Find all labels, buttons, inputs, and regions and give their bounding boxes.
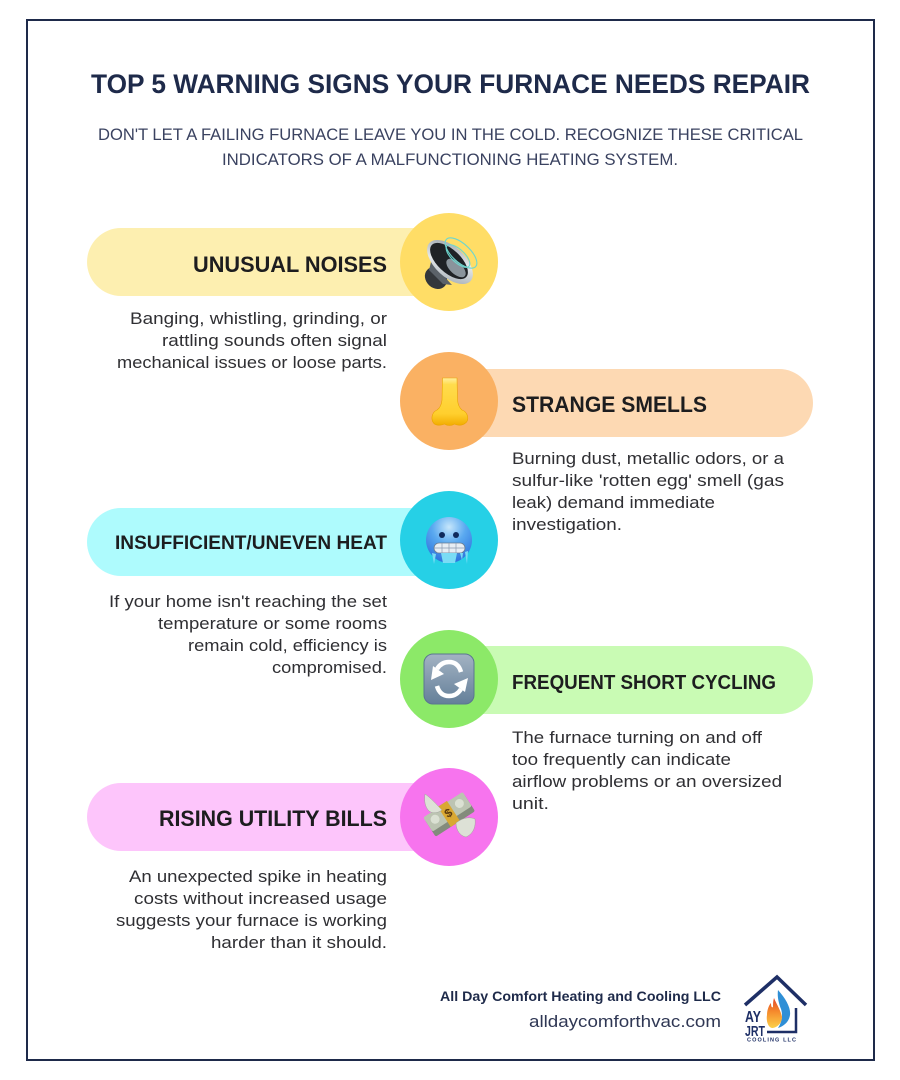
panel: strange smells (400, 352, 813, 534)
icon: flying money: $ (442, 805, 455, 821)
logo: AY (745, 1009, 761, 1026)
description: unusual noises: mechanical issues or loose parts. (117, 353, 387, 372)
footer company info: alldaycomforthvac.com (529, 1012, 721, 1031)
footer company info: All Day Comfort Heating and Cooling LLC (440, 988, 721, 1004)
description: rising bills: costs without increased usage (134, 889, 387, 908)
description: strange smells (512, 449, 785, 534)
description: insufficient heat: If your home isn't reaching the set (109, 592, 387, 611)
logo: COOLING LLC (747, 1038, 796, 1044)
description: insufficient heat: remain cold, efficiency is (188, 636, 387, 655)
description: rising bills: harder than it should. (211, 933, 387, 952)
description: rising bills (116, 867, 387, 952)
heading: short cycling: FREQUENT SHORT CYCLING (512, 672, 776, 694)
description: strange smells: investigation. (512, 515, 622, 534)
pill: short cycling (449, 646, 813, 714)
panel: unusual noises (87, 213, 498, 372)
description: unusual noises: Banging, whistling, grinding, or (130, 309, 387, 328)
icon: nose (432, 378, 468, 426)
pill: rising bills (87, 783, 449, 851)
description: short cycling: too frequently can indicate (512, 750, 731, 769)
subtitle: INDICATORS OF A MALFUNCTIONING HEATING SYSTEM. (222, 150, 678, 169)
icon circle: speaker (400, 213, 498, 311)
description: unusual noises: rattling sounds often signal (162, 331, 387, 350)
heading: rising bills: RISING UTILITY BILLS (159, 806, 387, 831)
subtitle: DON'T LET A FAILING FURNACE LEAVE YOU IN THE COLD. RECOGNIZE THESE CRITICAL (98, 125, 803, 144)
icon circle: flying money (400, 768, 498, 866)
description: rising bills: An unexpected spike in heating (129, 867, 387, 886)
heading: insufficient heat: INSUFFICIENT/UNEVEN HEAT (115, 533, 387, 554)
description: unusual noises (117, 309, 387, 372)
description: short cycling (512, 728, 782, 813)
logo: JRT (745, 1023, 765, 1040)
icon: cycle arrows (424, 654, 474, 704)
description: strange smells: leak) demand immediate (512, 493, 715, 512)
description: insufficient heat (109, 592, 387, 677)
icon circle: freezing face (400, 491, 498, 589)
logo (745, 977, 806, 1044)
pill: strange smells (449, 369, 813, 437)
title: TOP 5 WARNING SIGNS YOUR FURNACE NEEDS REPAIR (91, 69, 810, 99)
description: short cycling: airflow problems or an oversized (512, 772, 782, 791)
description: rising bills: suggests your furnace is working (116, 911, 387, 930)
description: strange smells: sulfur-like 'rotten egg' smell (gas (512, 471, 784, 490)
icon: speaker (419, 232, 482, 293)
panel: short cycling (400, 630, 813, 813)
subtitle (98, 125, 803, 169)
icon circle: cycle arrows (400, 630, 498, 728)
icon circle: nose (400, 352, 498, 450)
description: short cycling: The furnace turning on and off (512, 728, 762, 747)
description: insufficient heat: compromised. (272, 658, 387, 677)
description: strange smells: Burning dust, metallic odors, or a (512, 449, 785, 468)
heading: unusual noises: UNUSUAL NOISES (193, 252, 387, 277)
pill: insufficient heat (87, 508, 449, 576)
description: short cycling: unit. (512, 794, 549, 813)
icon: freezing face (426, 517, 472, 564)
panel: rising bills (87, 768, 498, 952)
panel: insufficient heat (87, 491, 498, 677)
footer company info (440, 988, 721, 1031)
pill: unusual noises (87, 228, 449, 296)
heading: strange smells: STRANGE SMELLS (512, 392, 707, 417)
description: insufficient heat: temperature or some rooms (158, 614, 387, 633)
